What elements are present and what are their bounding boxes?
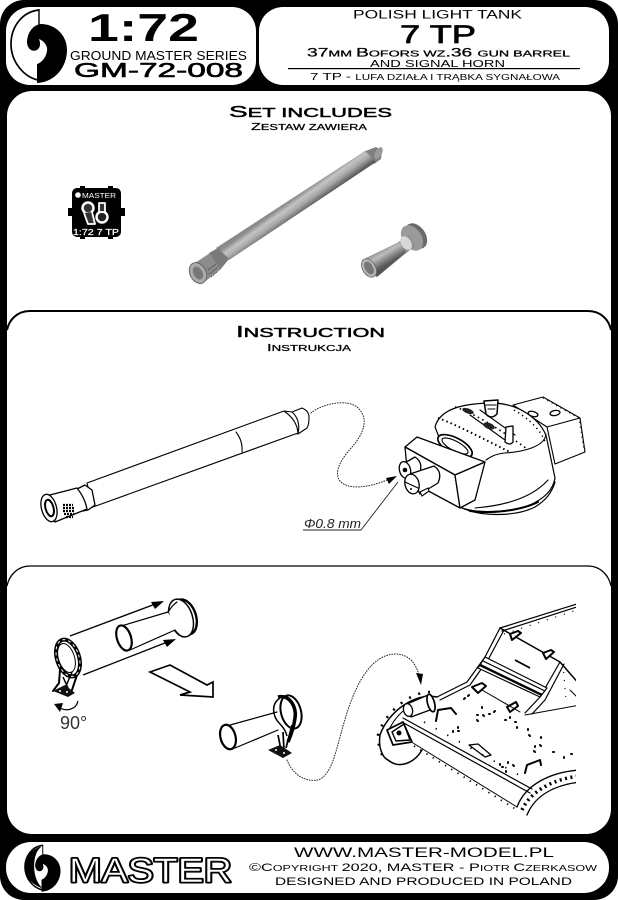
heading: set includes: S ET INCLUDES xyxy=(229,104,392,121)
brand wordmark: MASTER xyxy=(69,852,232,890)
subject title: 7 TP xyxy=(400,21,476,49)
icon: photo-etch fret: MASTER xyxy=(82,193,116,200)
heading: instruction: I NSTRUCTION xyxy=(236,324,385,341)
peg and cupola xyxy=(484,400,498,417)
origin line: DESIGNED AND PRODUCED IN POLAND xyxy=(275,876,572,888)
arrow: assembly direction xyxy=(150,665,213,697)
polish description: 7 TP - LUFA DZIAŁA I TRĄBKA SYGNAŁOWA xyxy=(310,71,561,83)
dotted path: horn to tank xyxy=(287,654,420,780)
series name: GROUND MASTER SERIES xyxy=(70,48,247,63)
icon: footer swirl logo xyxy=(25,845,61,892)
dotted path: barrel to turret xyxy=(311,403,394,487)
diagram: tank hull xyxy=(378,603,580,815)
copyright: ©C OPYRIGHT 2020, MASTER - P IOTR C ZERKASOW xyxy=(249,862,597,874)
callout: hole diameter: Φ0.8 mm xyxy=(304,516,361,531)
description line 1: 37 MM B OFORS WZ .36 GUN BARREL xyxy=(307,48,570,60)
hatch oval xyxy=(434,430,476,462)
icon: photo-etch fret: 1:72 7 TP xyxy=(73,228,119,237)
product code: GM-72-008 xyxy=(74,60,243,82)
panel outline: instruction xyxy=(7,311,611,330)
rivet chains xyxy=(438,418,510,452)
diagram: barrel line drawing xyxy=(38,408,309,523)
scale heading: 1:72 xyxy=(88,7,199,50)
rear sprocket xyxy=(380,696,437,765)
icon: rotate arrow xyxy=(54,701,78,712)
website: WWW.MASTER-MODEL.PL xyxy=(294,845,555,860)
arrow head xyxy=(416,673,423,685)
diagram: bracket before fitting xyxy=(52,637,84,697)
arrow head xyxy=(386,476,397,484)
diagram: horn assembled on bracket xyxy=(218,693,305,758)
rails xyxy=(402,718,532,793)
arrow: upper guide xyxy=(70,601,164,636)
panel: header right xyxy=(259,7,609,85)
gun tubes xyxy=(401,457,421,480)
panel: footer xyxy=(6,842,609,893)
part: gun barrel xyxy=(186,146,385,286)
arrow: lower guide xyxy=(83,639,176,675)
icon: master swirl logo xyxy=(11,9,67,83)
hatches and handles xyxy=(472,683,486,693)
part: signal horn xyxy=(358,219,432,280)
subheading: instrukcja: INSTRUKCJA xyxy=(267,343,352,354)
icon: photo-etch fret xyxy=(68,186,125,239)
callout: hole diameter xyxy=(303,482,398,531)
brand wordmark: MASTER xyxy=(69,852,232,890)
divider xyxy=(288,68,580,69)
label: rotate 90 degrees: 90° xyxy=(60,713,87,733)
front wheel xyxy=(517,770,580,815)
panel: header left xyxy=(6,7,256,85)
description line 2: AND SIGNAL HORN xyxy=(370,58,505,70)
diagram: signal horn xyxy=(113,596,201,653)
panel outline: horn step xyxy=(7,566,611,586)
mantlet box xyxy=(405,437,485,475)
subheading: zestaw zawiera: Z ESTAW ZAWIERA xyxy=(251,122,368,133)
diagram: turret xyxy=(397,397,585,514)
turret body xyxy=(435,403,555,512)
subject line: POLISH LIGHT TANK xyxy=(353,10,522,22)
rivets xyxy=(453,695,572,772)
rear box xyxy=(513,397,585,464)
louver xyxy=(478,657,547,697)
